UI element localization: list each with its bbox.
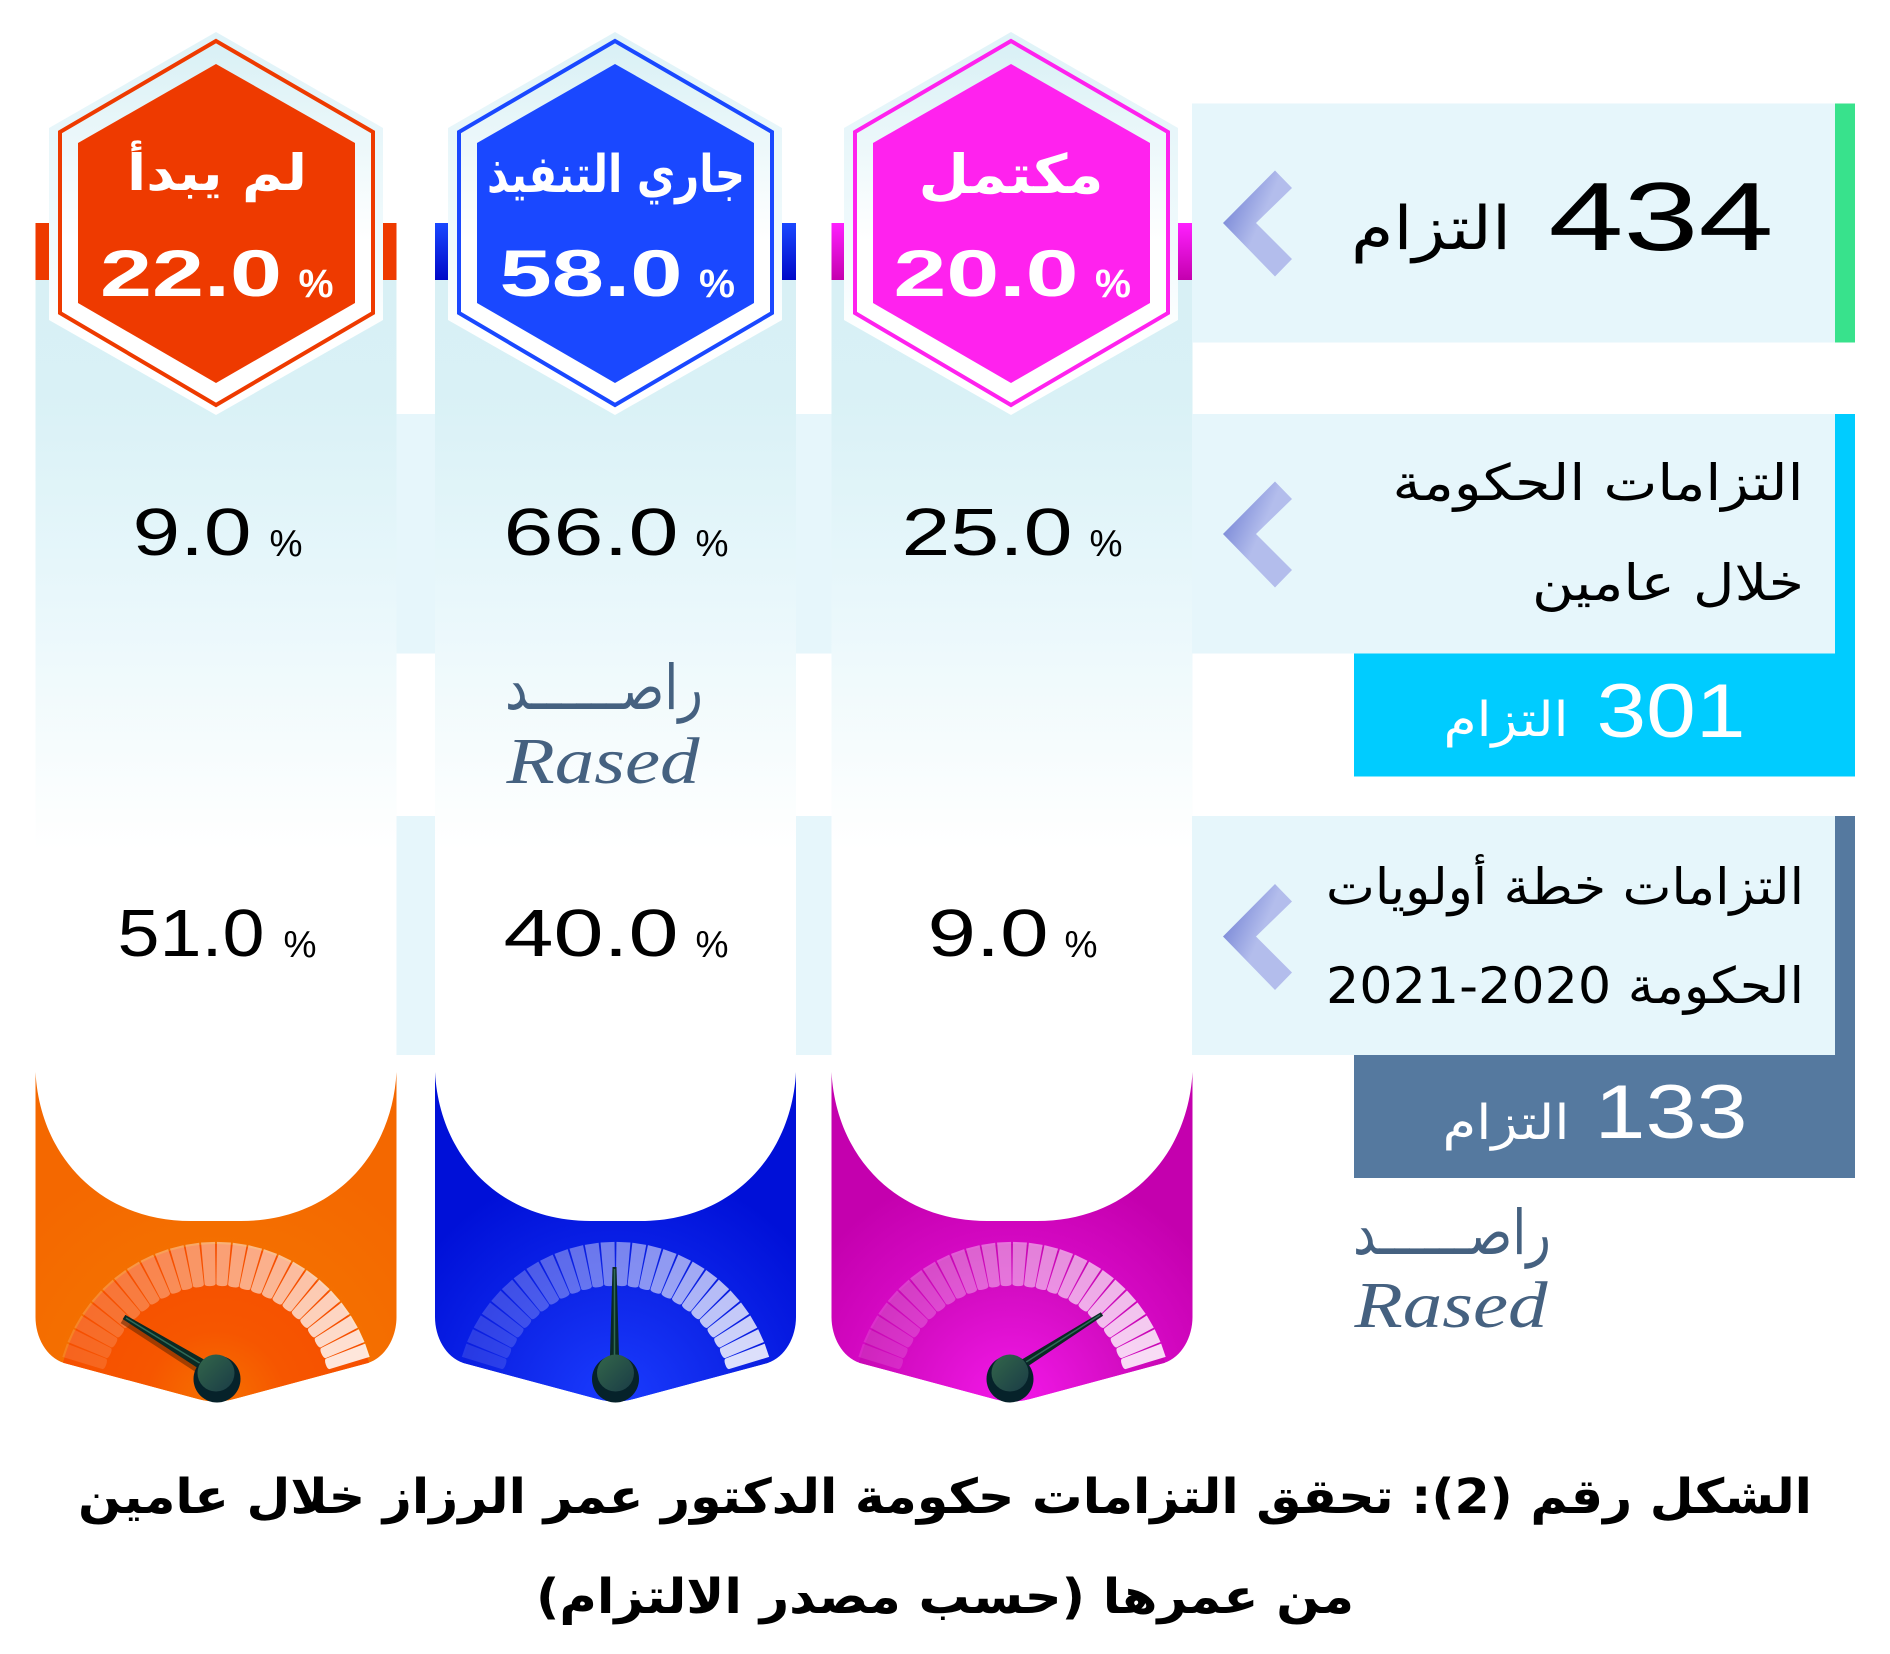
value: in progress, row 3: % (696, 924, 728, 966)
needle (592, 1267, 639, 1402)
hexagon: completed 20.0%: % (1095, 262, 1131, 306)
text: commitment: التزام (1351, 194, 1511, 264)
band: row 3 background (396, 816, 1835, 1055)
callout: 133 commitments: 133 (1594, 1070, 1748, 1155)
logo: Rased in column (505, 651, 703, 798)
band: row 2 background (396, 414, 1835, 654)
value: in progress, row 2: % (696, 523, 728, 565)
callout: 133 commitments: التزام (1442, 1095, 1570, 1151)
callout: 133 commitments (1354, 1055, 1855, 1178)
gauge: orange, needle low (36, 1072, 396, 1402)
text: panel heading (1392, 454, 1804, 612)
callout: 301 commitments: التزام (1444, 692, 1568, 748)
value: in progress, row 2: 66.0 (504, 495, 678, 570)
hexagon: not started 22.0%: لم يبدأ (127, 140, 307, 202)
text: panel heading: خلال عامين (1532, 554, 1804, 612)
icon: chevron (1223, 482, 1292, 588)
value: in progress, row 2 (504, 495, 728, 570)
value: completed, row 3: % (1064, 924, 1098, 966)
logo: Rased in column: راصــــــد (505, 651, 703, 724)
logo: Rased bottom right: Rased (1353, 1269, 1549, 1342)
value: in progress, row 3 (504, 896, 728, 971)
value: completed, row 2: 25.0 (902, 495, 1072, 570)
panel: column completed (832, 32, 1192, 1402)
value: completed, row 2: % (1090, 523, 1122, 565)
value: not started, row 2: 9.0 (132, 495, 252, 570)
needle (986, 1312, 1103, 1402)
caption: figure title: من عمرها (حسب مصدر الالتزام) (536, 1569, 1354, 1625)
text: 434: 434 (1548, 162, 1774, 271)
accent bar: green (1835, 104, 1855, 342)
icon: chevron (1223, 884, 1292, 990)
colour strip: orange (36, 223, 396, 280)
value: not started, row 3: % (284, 924, 316, 966)
text: panel heading: التزامات خطة أولويات (1326, 854, 1804, 917)
caption: figure title: الشكل رقم (2): تحقق التزامات حكومة الدكتور عمر الرزاز خلال عامين (78, 1469, 1812, 1525)
panel: government priorities plan commitments (1192, 816, 1855, 1178)
value: completed, row 3 (928, 896, 1098, 971)
text: panel heading: التزامات الحكومة (1392, 454, 1804, 512)
panel: total 434 commitments (1192, 104, 1855, 342)
hexagon: not started 22.0%: 22.0 (100, 236, 282, 310)
value: not started, row 2: % (270, 523, 302, 565)
hexagon: not started 22.0%: % (298, 262, 334, 306)
hexagon: completed 20.0%: 20.0 (894, 236, 1078, 310)
value: not started, row 3: 51.0 (118, 896, 264, 971)
accent bar: cyan (1835, 414, 1855, 654)
accent bar: slate (1835, 816, 1855, 1055)
text: panel heading (1326, 854, 1804, 1015)
logo: Rased in column: Rased (505, 725, 701, 798)
hexagon: completed 20.0% (844, 32, 1178, 415)
text: panel heading: الحكومة 2020-2021 (1326, 957, 1804, 1015)
logo: Rased bottom right (1353, 1196, 1551, 1342)
callout: 301 commitments (1354, 654, 1855, 776)
colour strip: magenta (832, 223, 1192, 280)
hexagon: in progress 58.0%: جاري التنفيذ (487, 145, 745, 205)
panel: column not started (36, 32, 396, 1402)
icon: chevron (1223, 170, 1292, 276)
panel: column in progress (435, 32, 796, 1402)
gauge: magenta, needle high (832, 1072, 1192, 1402)
hexagon: in progress 58.0%: 58.0 (500, 236, 682, 310)
hexagon: in progress 58.0% (448, 32, 782, 415)
gauge: blue, needle centre (435, 1072, 796, 1402)
caption: figure title (78, 1469, 1812, 1625)
callout: 301 commitments: 301 (1596, 669, 1746, 754)
value: not started, row 3 (118, 896, 316, 971)
hexagon: in progress 58.0%: % (699, 262, 735, 306)
hexagon: completed 20.0%: مكتمل (918, 143, 1104, 206)
colour strip: blue (435, 223, 796, 280)
value: completed, row 2 (902, 495, 1122, 570)
value: in progress, row 3: 40.0 (504, 896, 678, 971)
needle (121, 1315, 240, 1402)
value: completed, row 3: 9.0 (928, 896, 1048, 971)
value: not started, row 2 (132, 495, 302, 570)
hexagon: not started 22.0% (49, 32, 383, 415)
panel: government commitments in two years (1192, 414, 1855, 776)
logo: Rased bottom right: راصــــــد (1353, 1196, 1551, 1269)
